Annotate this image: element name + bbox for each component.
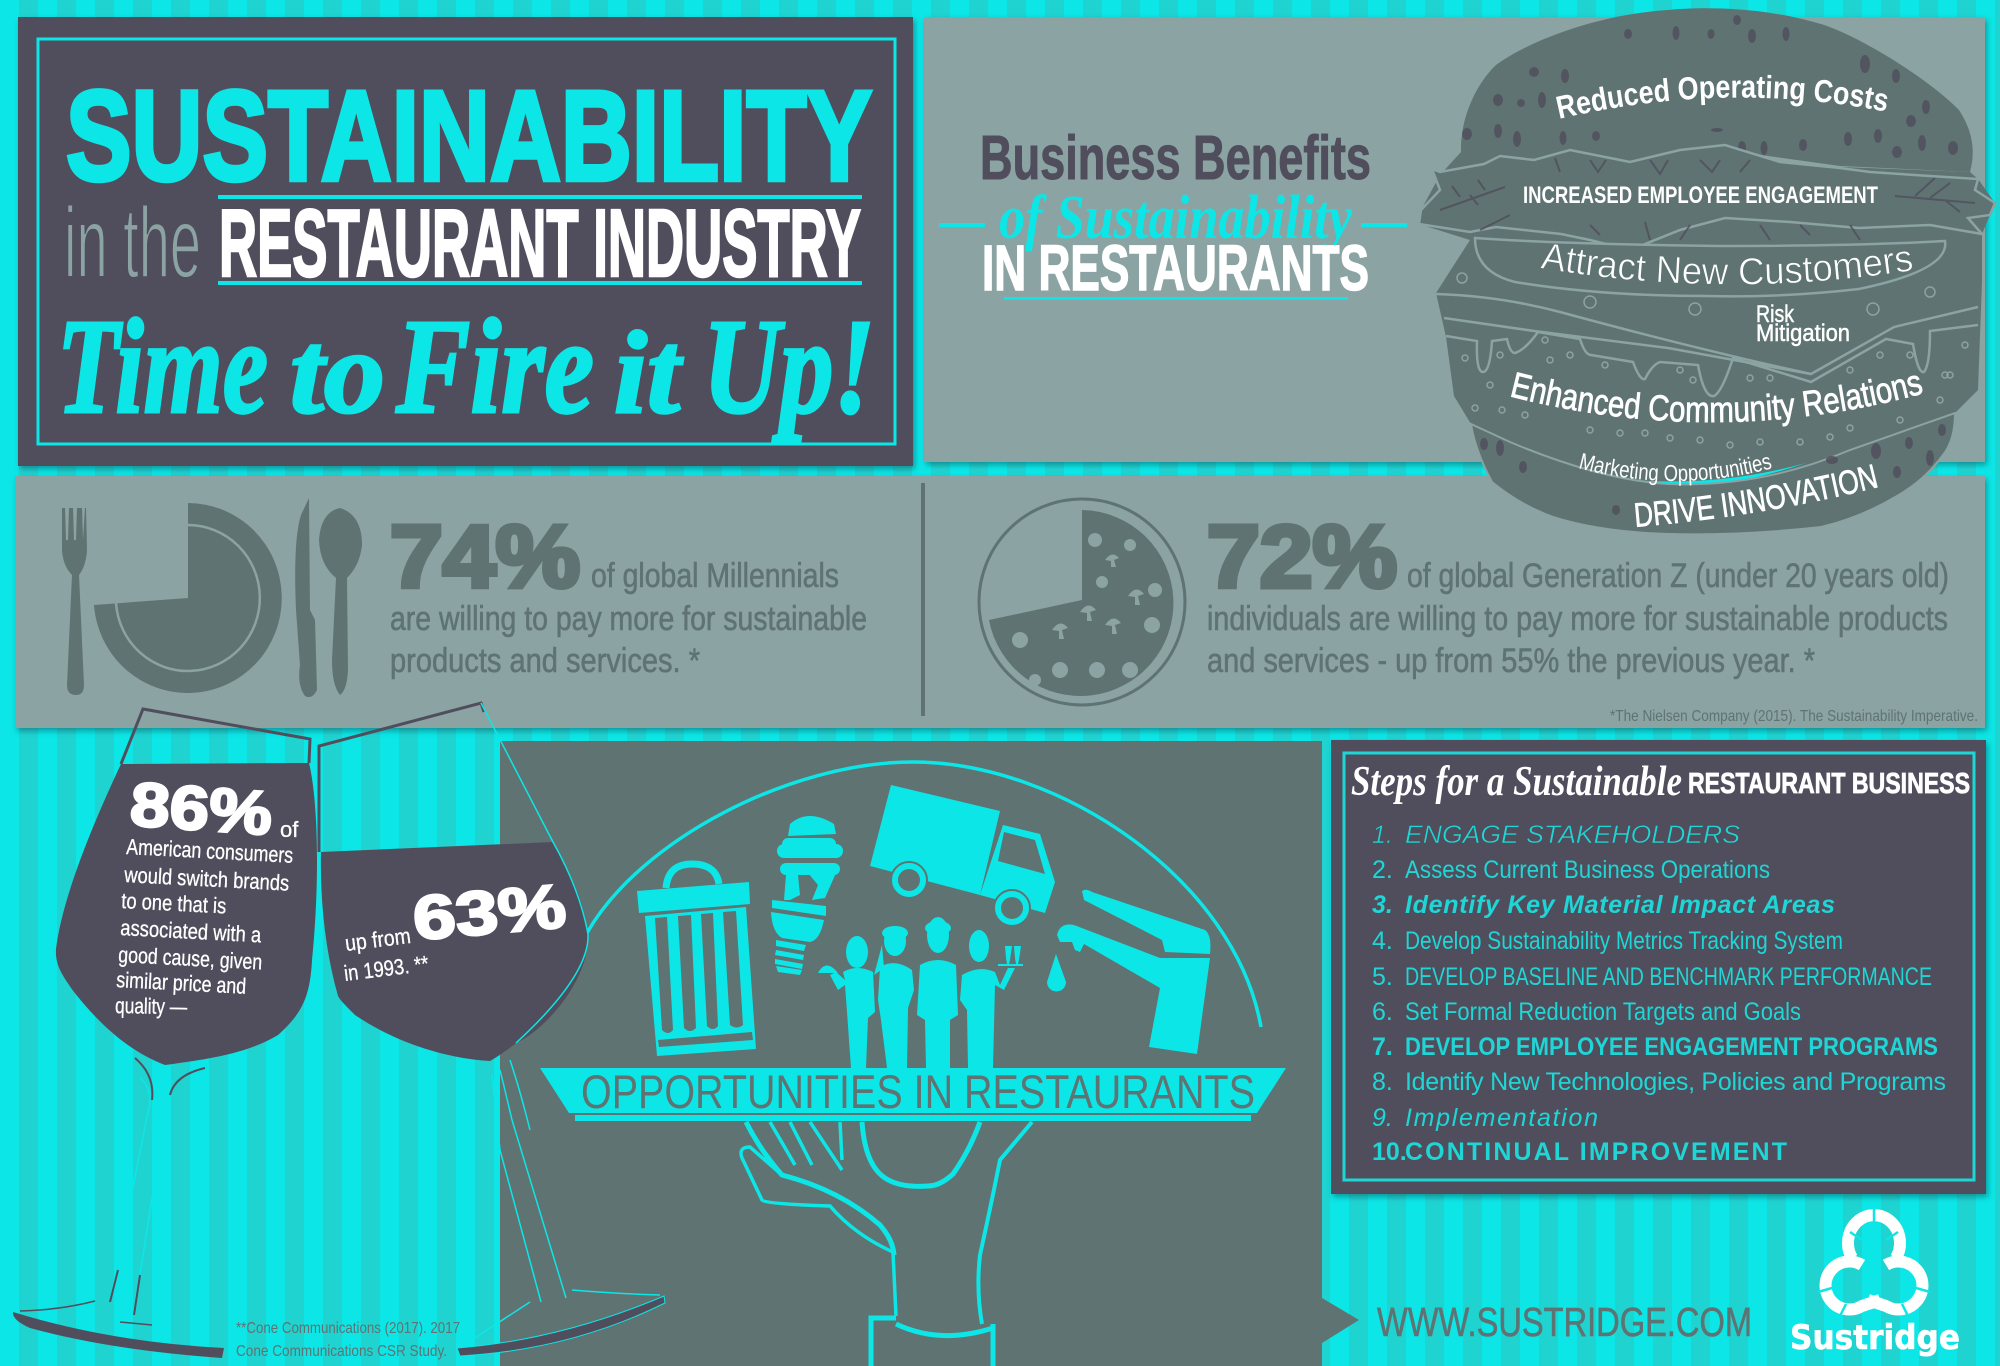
illustration: right wine glass <box>319 703 665 1356</box>
burger: top bun <box>1461 8 1973 172</box>
label: Marketing Opportunities: Marketing Opportunities <box>1580 453 1772 486</box>
text: 86 percent detail: of <box>280 817 299 842</box>
stat: 72 percent: and services - up from 55% the previous year. * <box>1207 642 1815 680</box>
list: steps: 1. <box>1372 821 1393 849</box>
heading: Business Benefits: Business Benefits <box>980 124 1371 193</box>
burger: silhouette backing <box>1419 152 1995 534</box>
heading: Time to Fire it Up: it <box>614 307 683 438</box>
burger: bottom bun <box>1471 413 1955 534</box>
heading: of Sustainability: of Sustainability <box>999 184 1352 252</box>
burger: marketing layer <box>1542 463 1806 486</box>
illustration: opportunities in restaurants <box>540 762 1286 1366</box>
heading: Sustainability: SUSTAINABILITY <box>66 65 872 208</box>
stat: 74 percent: of global Millennials <box>591 557 839 595</box>
list: steps: 10. <box>1372 1138 1407 1166</box>
stat: 74 percent: products and services. * <box>390 642 700 680</box>
burger: patty and cheese <box>1436 273 1978 448</box>
icon: spoon <box>319 508 362 695</box>
icon: trash can <box>637 864 756 1056</box>
icon: fork <box>62 508 87 695</box>
label: Reduced Operating Costs: Reduced Operating Costs <box>1556 74 1888 118</box>
burger: tomato layer <box>1475 238 1945 296</box>
icon: waiter hand <box>741 1122 1032 1366</box>
list: steps: Identify New Technologies, Policies and Programs <box>1405 1068 1946 1096</box>
illustration: burger <box>1420 8 1996 534</box>
label: Attract New Customers: Attract New Customers <box>1540 244 1912 285</box>
stat: 74 percent <box>390 507 867 680</box>
text: 86 percent detail: would switch brands <box>123 862 290 896</box>
text: in the: in the <box>64 187 201 299</box>
text: 86 percent detail: associated with a <box>120 915 262 947</box>
text: 86 percent detail <box>115 817 299 1019</box>
list: steps: 6. <box>1372 998 1393 1026</box>
heading: In Restaurants <box>982 232 1369 304</box>
list: steps: ENGAGE STAKEHOLDERS <box>1405 821 1740 849</box>
heading: Time to Fire it Up: to <box>290 307 385 438</box>
illustration: left wine glass <box>13 709 317 1358</box>
panel: statistics <box>15 476 1985 728</box>
text: 63 percent detail: in 1993. ** <box>343 951 430 986</box>
label: Enhanced Community Relations: Enhanced Community Relations <box>1510 372 1922 426</box>
list: steps: 2. <box>1372 856 1393 884</box>
stat: 74 percent: 74% <box>390 507 580 606</box>
list: steps: 5. <box>1372 963 1393 991</box>
text: 86 percent detail: similar price and <box>116 967 247 999</box>
text: Sustridge: Sustridge <box>1790 1318 1960 1358</box>
list: steps: DEVELOP EMPLOYEE ENGAGEMENT PROGRAMS <box>1405 1033 1938 1061</box>
label: Risk Mitigation: Mitigation <box>1756 320 1850 347</box>
text: 63 percent detail: up from <box>344 923 412 956</box>
label: Risk Mitigation: Risk <box>1756 301 1795 328</box>
stat: 74 percent: are willing to pay more for sustainable <box>390 600 867 638</box>
panel: steps <box>1331 740 1986 1194</box>
list: steps <box>1372 821 1946 1166</box>
icon: plate <box>94 503 282 693</box>
text: 86 percent detail: American consumers <box>126 834 294 868</box>
stat: 72 percent <box>1207 507 1949 680</box>
citation: Cone Communications: **Cone Communications (2017). 2017 <box>236 1320 460 1337</box>
citation: Cone Communications: Cone Communications CSR Study. <box>236 1343 447 1360</box>
list: steps: 7. <box>1372 1033 1393 1061</box>
stat: 72 percent: 72% <box>1207 507 1397 606</box>
list: steps: Assess Current Business Operations <box>1405 856 1770 884</box>
icon: light bulb <box>771 816 843 975</box>
heading: Time to Fire it Up: Time <box>57 292 268 442</box>
text: 86 percent detail: good cause, given <box>118 942 263 975</box>
label: Drive Innovation: DRIVE INNOVATION <box>1634 464 1878 528</box>
heading: In Restaurants: IN RESTAURANTS <box>982 232 1369 304</box>
heading: Restaurant Industry <box>218 190 862 297</box>
heading: Steps for a Sustainable: Steps for a Sustainable <box>1351 759 1682 805</box>
list: steps: 3. <box>1372 891 1393 919</box>
heading: Time to Fire it Up: Up! <box>703 292 875 442</box>
list: steps: 9. <box>1372 1104 1393 1132</box>
panel: business benefits <box>924 17 1985 462</box>
stat: 86 percent: 86% <box>128 770 274 849</box>
logo: Sustridge <box>1790 1206 1960 1358</box>
icon: restaurant staff <box>818 917 1023 1068</box>
panel: title <box>18 17 913 466</box>
label: Increased Employee Engagement: INCREASED EMPLOYEE ENGAGEMENT <box>1523 182 1878 209</box>
list: steps: Set Formal Reduction Targets and Goals <box>1405 998 1801 1026</box>
icon: knife <box>295 498 317 697</box>
arrow: website pointer <box>1322 1298 1359 1343</box>
citation: Cone Communications <box>236 1320 460 1360</box>
heading: Time to Fire it Up: Fire <box>395 292 594 442</box>
heading: Time to Fire it Up <box>57 292 875 442</box>
burger: lettuce <box>1419 145 1995 250</box>
list: steps: Develop Sustainability Metrics Tracking System <box>1405 927 1843 955</box>
arc: dome <box>587 762 1261 1027</box>
icon: delivery truck <box>870 785 1055 926</box>
panel: opportunities background <box>500 741 1322 1366</box>
banner: opportunities in restaurants: OPPORTUNITIES IN RESTAURANTS <box>581 1065 1255 1118</box>
text: 86 percent detail: to one that is <box>121 888 227 918</box>
icon: faucet <box>1047 890 1210 1054</box>
list: steps: Implementation <box>1405 1104 1598 1132</box>
list: steps: CONTINUAL IMPROVEMENT <box>1405 1138 1787 1166</box>
list: steps: 8. <box>1372 1068 1393 1096</box>
label: Risk Mitigation <box>1756 301 1850 347</box>
text: 86 percent detail: quality — <box>115 993 187 1019</box>
heading: Restaurant Industry: RESTAURANT INDUSTRY <box>219 190 861 297</box>
stat: 63 percent: 63% <box>410 872 569 954</box>
text: 63 percent detail <box>343 923 430 986</box>
icon: pizza <box>979 499 1185 705</box>
text: website: WWW.SUSTRIDGE.COM <box>1377 1299 1752 1345</box>
list: steps: Identify Key Material Impact Areas <box>1405 891 1835 919</box>
list: steps: 4. <box>1372 927 1393 955</box>
